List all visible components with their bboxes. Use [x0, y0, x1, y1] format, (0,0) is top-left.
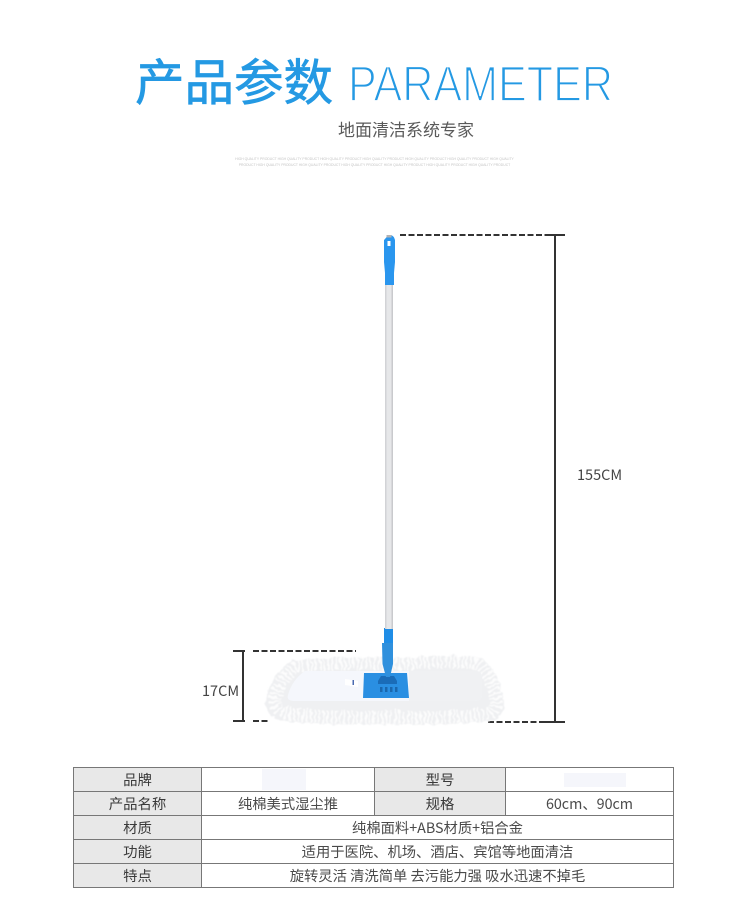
- row: brand and model: [74, 768, 633, 887]
- row: product name and size: 60cm、90cm: [546, 793, 633, 814]
- row: material: 材质: [123, 817, 152, 838]
- dimension: total height 155CM: 155CM: [577, 464, 622, 485]
- dimension: total height 155CM: [400, 235, 622, 722]
- brand placeholder: [262, 769, 306, 790]
- blue plate: [363, 673, 409, 698]
- subtitle: 地面清洁系统专家: [338, 116, 474, 141]
- spec table: [73, 767, 674, 888]
- fine print decorative caption: HIGH QUALITY PRODUCT HIGH QUALITY PRODUCT HIGH QUALITY PRODUCT HIGH QUALITY PRODUCT HIGH QUALITY PRODUCT HIGH QUALITY PRODUCT HIGH QUALITY PRODUCT HIGH QUALITY PRODUCT HIGH QUALITY PRODUCT HIGH QUALITY PRODUCT HIGH QUALITY PRODUCT HIGH QUALITY PRODUCT HIGH QUALITY PRODUCT: [235, 157, 514, 167]
- row: brand and model: 型号: [426, 769, 454, 790]
- row: function: 适用于医院、机场、酒店、宾馆等地面清洁: [302, 841, 573, 862]
- row: features: 特点: [123, 865, 152, 886]
- mop: [266, 235, 504, 725]
- row: material: [74, 816, 523, 839]
- mop head fringe: [266, 656, 504, 725]
- row: features: 旋转灵活 清洗简单 去污能力强 吸水迅速不掉毛: [290, 865, 585, 886]
- row: function: 功能: [123, 841, 152, 862]
- row: product name and size: 规格: [426, 793, 454, 814]
- row: material: 纯棉面料+ABS材质+铝合金: [352, 817, 523, 838]
- row: function: [74, 840, 573, 863]
- label tag: [345, 679, 358, 687]
- blue grip: [384, 235, 395, 285]
- row: brand and model: 品牌: [123, 769, 152, 790]
- dimension: mop head 17CM: [202, 651, 356, 721]
- row: product name and size: [74, 792, 633, 815]
- heading: product parameters: 产品参数: [135, 44, 333, 115]
- handle shaft: [385, 280, 393, 629]
- row: product name and size: 产品名称: [109, 793, 166, 814]
- model placeholder: [564, 773, 626, 787]
- mop pad: [288, 671, 482, 701]
- dimension: mop head 17CM: 17CM: [202, 680, 239, 701]
- blue connector: [382, 628, 393, 677]
- row: features: [74, 864, 585, 887]
- heading: PARAMETER: PARAMETER: [348, 56, 613, 112]
- row: product name and size: 纯棉美式湿尘推: [238, 793, 338, 814]
